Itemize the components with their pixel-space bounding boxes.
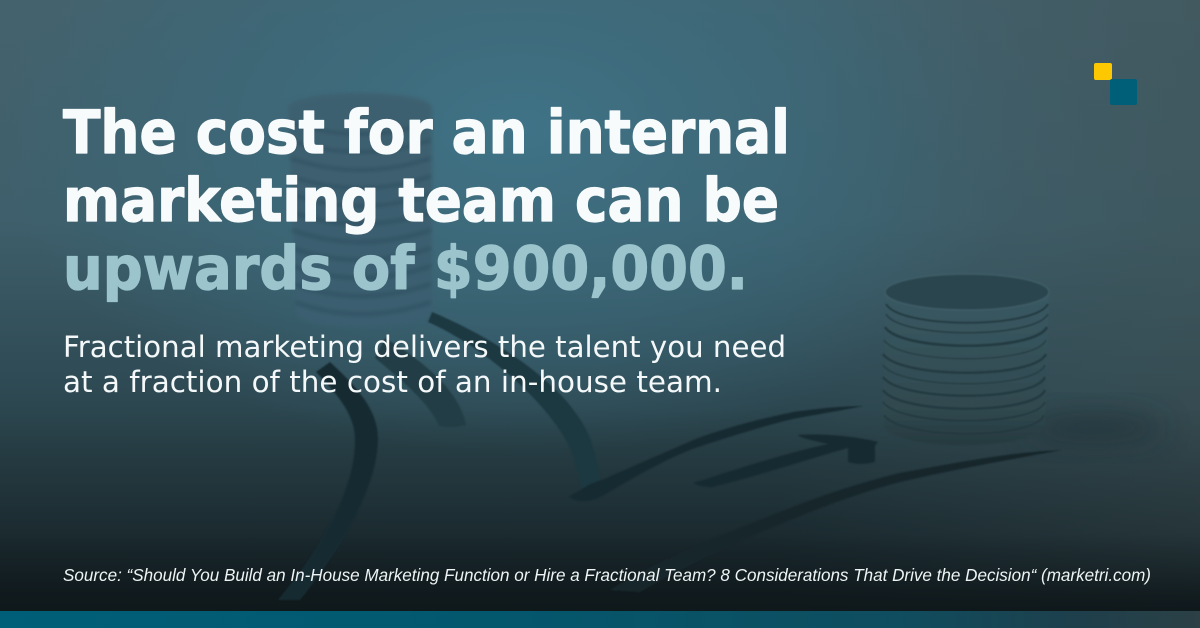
stroke: arrow	[693, 434, 878, 487]
subheading: Fractional marketing delivers the talent you need	[63, 330, 786, 364]
subheading: at a fraction of the cost of an in-house team.	[63, 365, 722, 399]
hand-drawn check mark strokes	[278, 312, 1062, 600]
stroke: check long arm	[568, 406, 863, 501]
bottom colour bar	[0, 611, 1200, 628]
headline: The cost for an internal	[63, 98, 790, 168]
stroke: check curve	[428, 312, 601, 492]
headline	[63, 98, 790, 304]
stroke: short middle curve	[375, 338, 466, 427]
headline: upwards of $900,000.	[63, 234, 748, 304]
stroke: left curve	[278, 362, 378, 600]
headline: marketing team can be	[63, 166, 779, 236]
logo icon	[1094, 63, 1137, 105]
coin stack shadow	[1025, 412, 1165, 444]
blurred coin stack, left	[288, 93, 432, 327]
coin stack, right	[883, 274, 1049, 445]
source citation: Source: “Should You Build an In-House Marketing Function or Hire a Fractional Team? 8 Considerations That Drive the Decision“ (marketri.com)	[63, 565, 1151, 585]
stroke: long lower sweep	[610, 450, 1062, 592]
subheading	[63, 330, 786, 399]
